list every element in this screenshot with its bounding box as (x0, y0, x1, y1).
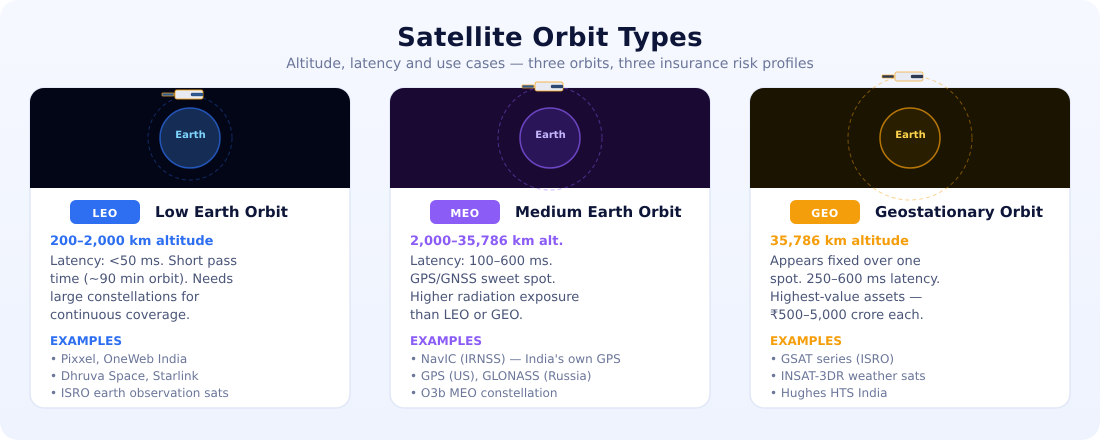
MEO description (410, 254, 579, 323)
MEO description: Higher radiation exposure (410, 290, 579, 305)
LEO examples: • Dhruva Space, Starlink (50, 369, 199, 383)
MEO heading: Medium Earth Orbit (515, 203, 682, 221)
LEO description (50, 254, 237, 323)
panel: LEO card (30, 88, 350, 408)
GEO examples: • Hughes HTS India (770, 386, 887, 400)
LEO earth: Earth (175, 130, 206, 141)
LEO badge: LEO (92, 207, 118, 220)
MEO examples: • NavIC (IRNSS) — India's own GPS (410, 352, 621, 366)
GEO description: ₹500–5,000 crore each. (770, 308, 924, 323)
MEO badge: MEO (450, 207, 480, 220)
title: Satellite Orbit Types (397, 23, 703, 53)
GEO badge (790, 200, 860, 224)
MEO earth: Earth (535, 130, 566, 141)
subtitle: Altitude, latency and use cases — three orbits, three insurance risk profiles (286, 56, 814, 72)
GEO description: Appears fixed over one (770, 254, 921, 269)
GEO description: spot. 250–600 ms latency. (770, 272, 940, 287)
GEO orbit ring (848, 76, 972, 200)
MEO space header (390, 88, 710, 188)
MEO examples: EXAMPLES (410, 334, 482, 348)
MEO badge (430, 200, 500, 224)
MEO examples (410, 334, 621, 400)
LEO heading: Low Earth Orbit (155, 203, 288, 221)
GEO heading: Geostationary Orbit (875, 203, 1043, 221)
GEO examples (770, 334, 926, 400)
icon: LEO satellite (162, 90, 203, 99)
GEO earth (880, 108, 940, 168)
icon: GEO satellite (882, 72, 923, 81)
GEO badge: GEO (811, 207, 839, 220)
GEO space header (750, 88, 1070, 188)
LEO space header (30, 88, 350, 188)
MEO description: GPS/GNSS sweet spot. (410, 272, 556, 287)
LEO badge (70, 200, 140, 224)
GEO examples: • INSAT-3DR weather sats (770, 369, 926, 383)
panel: GEO card (750, 72, 1070, 408)
panel: MEO card (390, 82, 710, 408)
MEO description: than LEO or GEO. (410, 308, 523, 323)
GEO examples: EXAMPLES (770, 334, 842, 348)
GEO description (770, 254, 940, 323)
LEO examples: • ISRO earth observation sats (50, 386, 229, 400)
LEO examples (50, 334, 229, 400)
LEO description: continuous coverage. (50, 308, 190, 323)
icon: MEO satellite (522, 82, 563, 91)
LEO earth (160, 108, 220, 168)
GEO examples: • GSAT series (ISRO) (770, 352, 894, 366)
LEO description: Latency: <50 ms. Short pass (50, 254, 237, 269)
MEO description: Latency: 100–600 ms. (410, 254, 553, 269)
MEO orbit ring (498, 86, 602, 190)
MEO examples: • GPS (US), GLONASS (Russia) (410, 369, 591, 383)
MEO examples: • O3b MEO constellation (410, 386, 558, 400)
LEO examples: • Pixxel, OneWeb India (50, 352, 187, 366)
LEO altitude: 200–2,000 km altitude (50, 234, 214, 249)
LEO description: large constellations for (50, 290, 200, 305)
GEO earth: Earth (895, 130, 926, 141)
LEO examples: EXAMPLES (50, 334, 122, 348)
MEO altitude: 2,000–35,786 km alt. (410, 234, 563, 249)
MEO earth (520, 108, 580, 168)
LEO orbit ring (148, 96, 232, 180)
LEO description: time (~90 min orbit). Needs (50, 272, 233, 287)
GEO altitude: 35,786 km altitude (770, 234, 909, 249)
GEO description: Highest-value assets — (770, 290, 922, 305)
